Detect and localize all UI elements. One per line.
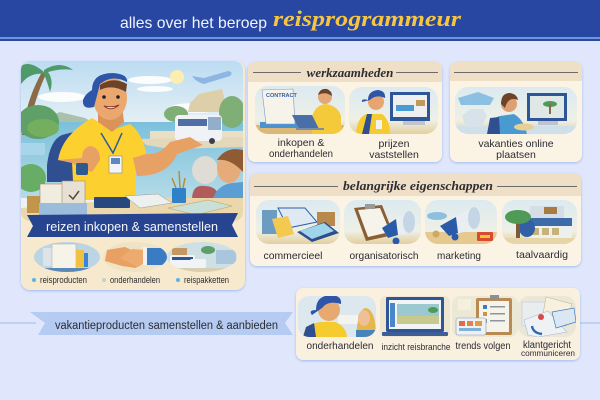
label: inkopen & [278,137,324,149]
legend: onderhandelen: onderhandelen [110,275,160,285]
title [120,6,462,32]
title: reisprogrammeur [273,6,462,31]
cap [83,73,127,108]
thumbnail: trends volgen [452,295,518,337]
banner: reizen inkopen & samenstellen: reizen inkopen & samenstellen [46,219,218,234]
label: vaststellen [369,149,419,161]
ribbon: vakantieproducten: vakantieproducten samenstellen & aanbieden [55,320,278,332]
thumbnail: contract: CONTRACT [266,93,297,99]
arm [133,137,203,176]
thumbnail: prijzen [349,87,438,134]
panel: reizen inkopen en samenstellen [16,61,245,290]
label: vakanties online [478,138,554,150]
label: communiceren [521,349,575,358]
illustration: travel programmer scene [16,61,245,221]
panel: belangrijke eigenschappen [250,173,581,266]
thumbnail: organisatorisch [344,200,421,244]
travellers [192,156,218,184]
label: inzicht reisbranche [382,342,450,352]
desk [21,198,243,221]
palm tree [22,72,46,135]
label: onderhandelen [306,340,374,352]
notebook and map [94,197,130,208]
label: marketing [437,250,481,262]
panel: vakanties online plaatsen [450,62,582,162]
legend: reisproducten: reisproducten [40,275,87,285]
panel: werkzaamheden [248,62,442,162]
shirt [58,118,147,200]
thumbnail: laptop [380,296,450,337]
title: alles over het beroep [120,15,267,32]
ribbon: vakantieproducten [30,312,293,335]
connector line left [0,322,36,324]
legend: reispakketten: reispakketten [184,275,229,285]
thumbnail: online plaatsen [455,87,577,134]
banner: reizen inkopen & samenstellen [27,213,238,237]
badge [101,133,122,153]
label: prijzen [379,138,410,150]
label: plaatsen [496,149,536,161]
pencil cup [172,188,186,203]
thumbnail: reispakketten [167,242,237,272]
hand on strap [58,146,100,172]
heading: werkzaamheden [307,65,393,80]
thumbnail: marketing [425,200,497,244]
connector line right [580,322,600,324]
plane [192,71,232,84]
file tray [27,196,41,213]
thumbnail: contract [255,86,345,134]
thumbnail: onderhandelen [103,242,167,272]
label: commercieel [264,250,322,262]
building [188,89,228,112]
label: taalvaardig [516,249,568,261]
label: onderhandelen [269,148,333,160]
thumbnail: onderhandelen [298,295,376,337]
thumbnail: commercieel [256,200,340,244]
bus [175,115,222,144]
label: organisatorisch [350,250,419,262]
thumbnail: reisproducten [34,242,100,272]
heading: belangrijke eigenschappen [343,178,493,193]
backpack [47,132,73,182]
neck and head [98,112,124,132]
header band [0,0,600,41]
thumbnail: klantgericht [518,296,576,337]
panel: vaardigheden [296,288,580,360]
label: klantgericht [523,340,571,351]
label: trends volgen [456,340,511,352]
thumbnail: taalvaardig [502,200,577,244]
